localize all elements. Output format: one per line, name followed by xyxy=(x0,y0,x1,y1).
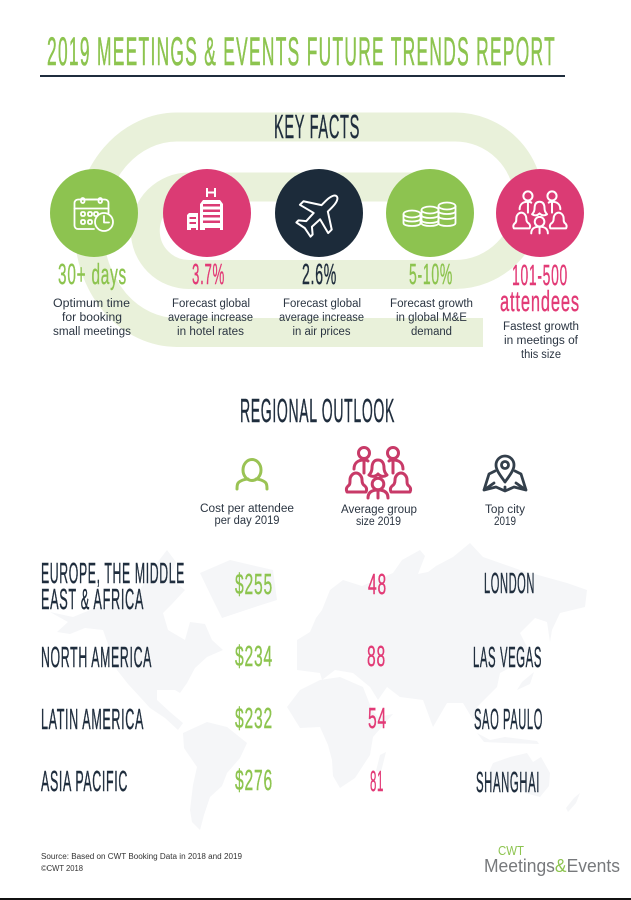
caption xyxy=(341,504,417,528)
caption xyxy=(200,503,294,527)
description: Fastest growth xyxy=(503,321,579,333)
value xyxy=(500,260,580,318)
logo: CWT Meetings & Events: CWT xyxy=(498,843,524,858)
description: Forecast global xyxy=(283,298,361,310)
group size: 88 xyxy=(367,641,386,673)
description xyxy=(279,298,364,338)
icon: person xyxy=(237,460,267,489)
table row: EMEA: EUROPE, THE MIDDLE xyxy=(41,558,185,590)
column: average group size xyxy=(341,448,417,528)
group size: 54 xyxy=(368,703,387,735)
panel: hotel rates xyxy=(163,169,253,338)
icon: calendar xyxy=(74,198,113,231)
group size: 48 xyxy=(368,569,387,601)
logo: CWT Meetings & Events xyxy=(484,843,620,876)
region xyxy=(41,558,185,616)
table row: Latin America: LATIN AMERICA xyxy=(41,704,144,736)
region: EAST & AFRICA xyxy=(41,584,144,616)
map: indonesia xyxy=(477,733,539,744)
panel: air prices xyxy=(275,169,364,338)
description: in air prices xyxy=(292,326,351,338)
table row: Asia Pacific: ASIA PACIFIC xyxy=(41,766,128,798)
cost: $276 xyxy=(235,765,273,797)
panel: M&E demand: 5-10% xyxy=(409,259,453,291)
caption: Average group xyxy=(341,504,417,516)
map: japan xyxy=(517,672,534,690)
circle xyxy=(163,169,251,257)
icon: coins xyxy=(404,202,456,226)
panel: hotel rates: 3.7% xyxy=(192,259,225,291)
description: for booking xyxy=(62,312,122,324)
circle xyxy=(50,169,138,257)
map: south america xyxy=(183,722,247,830)
table row: Asia Pacific: 81 xyxy=(370,766,384,798)
caption: per day 2019 xyxy=(214,515,280,527)
table row: North America xyxy=(41,641,542,674)
column: top city xyxy=(484,456,526,528)
map: new zealand xyxy=(566,793,580,812)
cost: $234 xyxy=(235,641,273,673)
description: Optimum time xyxy=(53,298,130,310)
bottom rule xyxy=(0,898,631,900)
text: LONDON xyxy=(484,568,535,600)
table row: EMEA xyxy=(41,558,535,616)
description: Forecast growth xyxy=(390,298,473,310)
cost: $232 xyxy=(235,703,273,735)
icon: map pin xyxy=(484,456,526,491)
text: REGIONAL OUTLOOK xyxy=(240,392,395,429)
value: 30+ days xyxy=(58,259,127,291)
panel: attendees xyxy=(496,169,584,361)
description: average increase xyxy=(279,312,364,324)
panel: 30+ days xyxy=(50,169,138,338)
description: Forecast global xyxy=(172,298,250,310)
caption: 2019 xyxy=(494,516,516,528)
source note: ©CWT 2018 xyxy=(41,864,84,873)
map: north america xyxy=(50,550,223,730)
panel: M&E demand xyxy=(386,169,474,338)
description: in global M&E xyxy=(396,312,467,324)
circle xyxy=(496,169,584,257)
caption: Cost per attendee xyxy=(200,503,294,515)
source note xyxy=(41,852,243,873)
description xyxy=(168,298,253,338)
cost: $255 xyxy=(235,569,273,601)
panel: air prices: 2.6% xyxy=(302,259,337,291)
description: in meetings of xyxy=(504,335,579,347)
table row: Latin America xyxy=(41,703,543,736)
description: demand xyxy=(411,326,452,338)
title rule xyxy=(40,75,565,77)
map: australia xyxy=(489,753,550,797)
value: 101-500 xyxy=(512,260,568,292)
logo: CWT Meetings & Events: Meetings&Events xyxy=(484,855,620,876)
source note: Source: Based on CWT Booking Data in 2018 and 2019 xyxy=(41,852,243,861)
description xyxy=(53,298,131,338)
spiral track xyxy=(89,127,529,332)
description: this size xyxy=(521,349,561,361)
description: small meetings xyxy=(53,326,131,338)
map: greenland xyxy=(200,560,277,618)
caption: Top city xyxy=(485,504,525,516)
map: madagascar xyxy=(376,752,386,772)
icon: crowd xyxy=(513,191,567,233)
description: in hotel rates xyxy=(177,326,244,338)
icon: hotel xyxy=(187,188,223,230)
description xyxy=(390,298,473,338)
map: eurasia xyxy=(297,543,587,730)
world map background xyxy=(50,543,587,830)
circle xyxy=(275,169,363,257)
column: cost per attendee xyxy=(200,460,294,527)
map: africa xyxy=(287,677,393,788)
text: KEY FACTS xyxy=(274,108,360,145)
table row: North America: NORTH AMERICA xyxy=(41,642,152,674)
table row: Asia Pacific xyxy=(41,765,540,799)
icon: group xyxy=(346,448,411,498)
caption xyxy=(485,504,525,528)
icon: plane xyxy=(289,182,351,244)
circle xyxy=(386,169,474,257)
description xyxy=(503,321,579,361)
description: average increase xyxy=(168,312,253,324)
caption: size 2019 xyxy=(356,516,401,528)
